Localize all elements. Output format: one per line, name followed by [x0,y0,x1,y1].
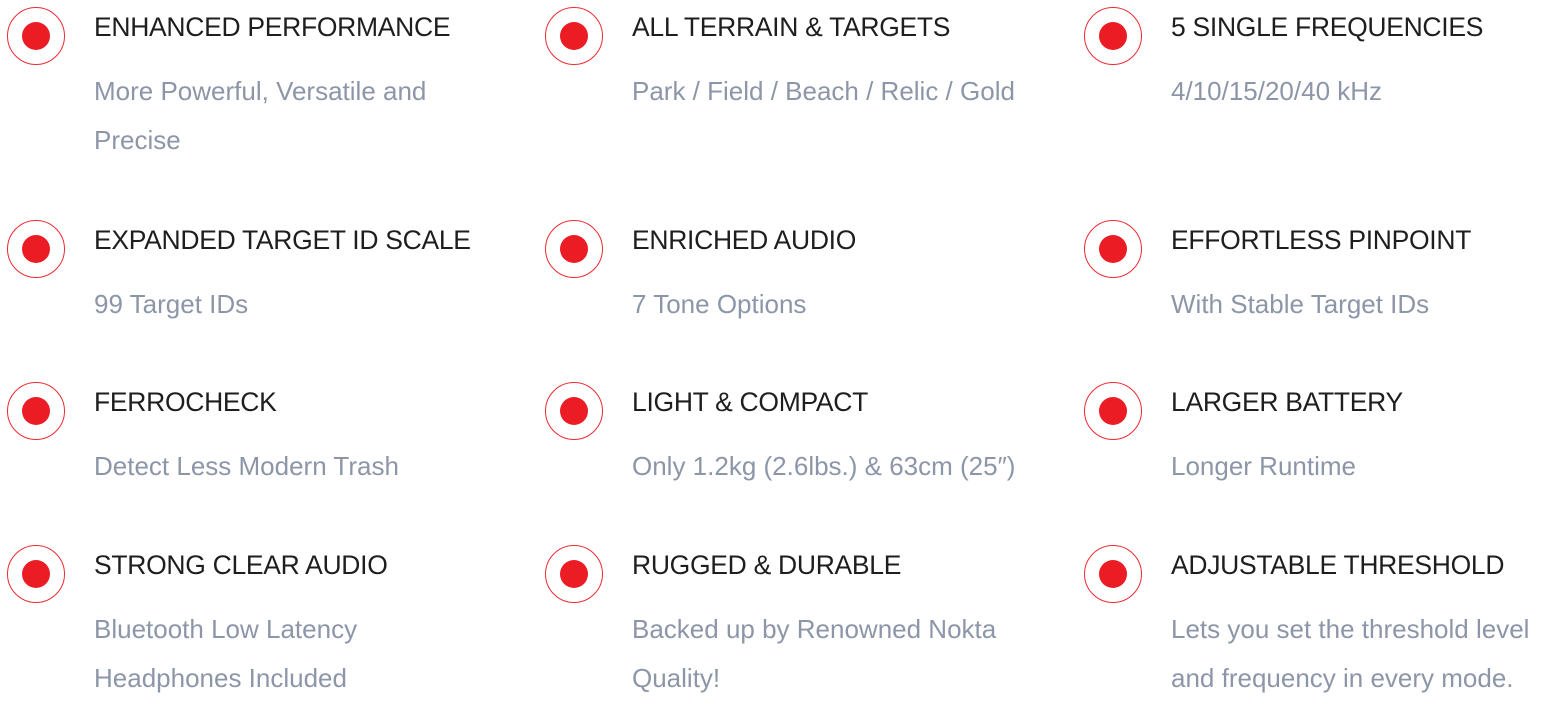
item: pinpoint: EFFORTLESS PINPOINT [1171,225,1471,255]
item: light compact: LIGHT & COMPACT [632,387,868,417]
item: frequencies: 5 SINGLE FREQUENCIES [1171,12,1483,42]
item: threshold: Lets you set the threshold level [1171,614,1529,644]
item: frequencies: 4/10/15/20/40 kHz [1171,76,1382,106]
item: light compact [545,382,1015,481]
item: ferrocheck [7,382,399,481]
item: rugged [545,545,996,693]
item: battery: LARGER BATTERY [1171,387,1403,417]
item: clear audio: STRONG CLEAR AUDIO [94,550,388,580]
item: ferrocheck: FERROCHECK [94,387,277,417]
item: pinpoint [1084,220,1471,319]
item: light compact: Only 1.2kg (2.6lbs.) & 63cm (25″) [632,451,1015,481]
item: battery: Longer Runtime [1171,451,1356,481]
item: rugged: Backed up by Renowned Nokta [632,614,996,644]
item: all terrain: Park / Field / Beach / Relic / Gold [632,76,1015,106]
item: target id: 99 Target IDs [94,289,248,319]
item: threshold [1084,545,1529,693]
item: enhanced performance [7,7,450,155]
item: pinpoint: With Stable Target IDs [1171,289,1429,319]
item: enriched audio [545,220,856,319]
item: frequencies [1084,7,1483,106]
item: clear audio: Headphones Included [94,663,347,693]
item: threshold: ADJUSTABLE THRESHOLD [1171,550,1504,580]
item: enhanced performance: ENHANCED PERFORMANCE [94,12,450,42]
item: clear audio: Bluetooth Low Latency [94,614,357,644]
item: enriched audio: 7 Tone Options [632,289,806,319]
item: ferrocheck: Detect Less Modern Trash [94,451,399,481]
item: target id: EXPANDED TARGET ID SCALE [94,225,471,255]
item: rugged: Quality! [632,663,720,693]
item: threshold: and frequency in every mode. [1171,663,1514,693]
item: enhanced performance: More Powerful, Versatile and [94,76,426,106]
item: rugged: RUGGED & DURABLE [632,550,901,580]
item: enriched audio: ENRICHED AUDIO [632,225,856,255]
item: battery [1084,382,1403,481]
item: clear audio [7,545,388,693]
item: all terrain [545,7,1015,106]
item: all terrain: ALL TERRAIN & TARGETS [632,12,950,42]
item: target id [7,220,471,319]
item: enhanced performance: Precise [94,125,181,155]
